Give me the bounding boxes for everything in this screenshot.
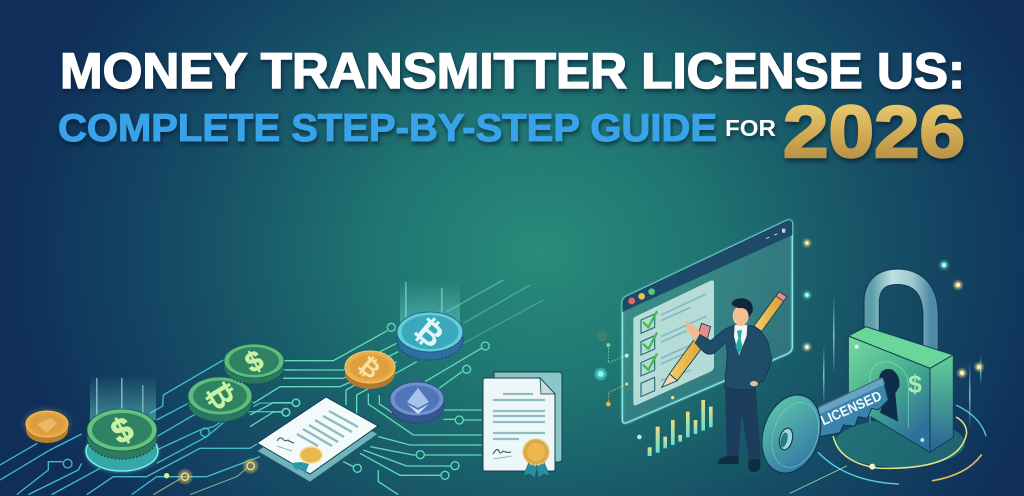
- document: tilted certificate: [257, 397, 378, 482]
- shoes: [718, 456, 760, 472]
- key with licensed label: [752, 377, 888, 481]
- checklist panel: [633, 280, 714, 405]
- year 2026: 2026: [783, 92, 965, 173]
- businessman figure: [685, 298, 772, 477]
- tie: [735, 330, 743, 354]
- lock body: [848, 327, 953, 368]
- subtitle: COMPLETE STEP-BY-STEP GUIDE: [58, 107, 717, 150]
- browser window with checklist: [622, 220, 792, 423]
- glowing circuit nodes: [153, 459, 258, 495]
- title line 1: MONEY TRANSMITTER LICENSE US:: [60, 43, 965, 99]
- key label: LICENSED: [818, 387, 884, 428]
- left hand pointing: [685, 321, 700, 342]
- key shaft: [817, 377, 888, 437]
- coin: teal bitcoin: [397, 280, 463, 360]
- coin: gold bitcoin: [345, 351, 395, 389]
- checklist rows: [641, 294, 707, 397]
- window frame glow: [622, 220, 792, 423]
- window controls: [766, 229, 785, 239]
- window title bar: [622, 220, 792, 312]
- shackle end caps: [909, 315, 952, 353]
- pencil behind figure: [754, 292, 787, 331]
- shirt: [734, 325, 747, 355]
- title: [58, 43, 965, 173]
- jacket: [695, 325, 772, 390]
- sparkles right side: [804, 240, 983, 430]
- window frame: [622, 220, 792, 423]
- coin: main green dollar with glow platform: $: [105, 410, 140, 452]
- coin: green bitcoin: ₿: [198, 376, 242, 416]
- coin: gold bitcoin: ₿: [353, 351, 386, 385]
- trousers: [725, 385, 761, 459]
- key bow: [752, 387, 830, 481]
- circuit lines centre: [250, 280, 543, 495]
- shadow: [709, 455, 769, 477]
- face: [733, 306, 749, 326]
- coin: gold ethereum: [23, 408, 71, 443]
- dollar sign: $: [908, 372, 922, 399]
- circuit lines left: [0, 360, 300, 495]
- connector nodes left of window: [595, 331, 629, 406]
- base rings: [790, 405, 986, 493]
- coin: teal bitcoin: ₿: [407, 310, 452, 356]
- shackle: [872, 277, 931, 353]
- keyhole: [870, 362, 908, 428]
- hair: [731, 298, 753, 317]
- coin: green dollar: [224, 344, 284, 384]
- coin: green dollar: $: [240, 344, 269, 379]
- pencil in checklist: [662, 323, 711, 387]
- coin: main green dollar with glow platform: [86, 375, 158, 472]
- coin: blue ethereum: [390, 382, 444, 423]
- bar chart: [637, 396, 713, 456]
- word: for: FOR: [725, 115, 776, 141]
- window dots: [628, 288, 655, 304]
- right hand on hip: [750, 381, 758, 386]
- coin: green bitcoin: [188, 376, 252, 422]
- padlock: [790, 277, 986, 493]
- document: upright certificate with seal: [483, 372, 562, 478]
